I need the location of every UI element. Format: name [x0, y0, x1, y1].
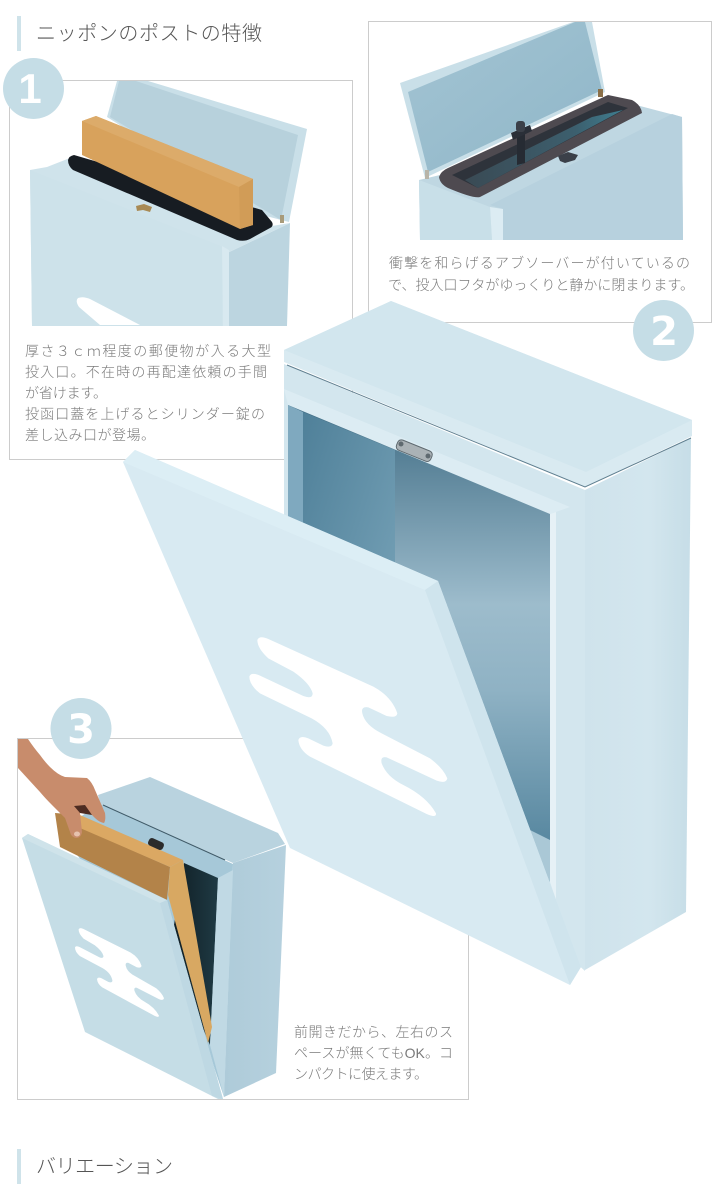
badge 1 — [3, 58, 64, 119]
text block 2: で、投入口フタがゆっくりと静かに閉まります。 — [388, 277, 694, 293]
photo: front opening with parcel and hand — [18, 739, 286, 1099]
main illustration: open mailbox — [123, 301, 692, 985]
icon: cloud cut-out emblem — [249, 637, 447, 816]
text block 3: ンパクトに使えます。 — [294, 1066, 428, 1082]
text block 2 — [388, 255, 694, 293]
latch plate — [395, 439, 433, 463]
panel 2: absorber lid — [368, 22, 712, 322]
badge 3 — [50, 698, 112, 759]
text block 1: 投函口蓋を上げるとシリンダー錠の — [25, 406, 265, 422]
text block 1: 投入口。不在時の再配達依頼の手間 — [25, 364, 267, 380]
heading: バリエーション: バリエーション — [36, 1156, 173, 1178]
text block 1: が省けます。 — [25, 385, 107, 401]
front door with cloud cut-out — [123, 450, 581, 985]
panel 3: front opening — [18, 738, 468, 1100]
text block 1 — [25, 343, 271, 443]
text block 3: 前開きだから、左右のス — [294, 1024, 453, 1040]
text block 3 — [294, 1024, 453, 1082]
icon: hand holding parcel — [18, 739, 105, 838]
absorber frame — [439, 95, 642, 197]
badge 2: 2 — [650, 309, 678, 355]
text block 1: 差し込み口が登場。 — [25, 427, 155, 443]
text block 2: 衝撃を和らげるアブソーバーが付いているの — [389, 255, 690, 271]
badge 1: 1 — [18, 65, 42, 112]
text block 1: 厚さ３ｃｍ程度の郵便物が入る大型 — [25, 343, 271, 359]
heading: ニッポンのポストの特徴 — [17, 16, 262, 51]
box lid — [284, 301, 692, 487]
heading: バリエーション — [17, 1149, 173, 1184]
heading: ニッポンのポストの特徴: ニッポンのポストの特徴 — [36, 22, 262, 45]
panel 1: large mail slot — [10, 80, 352, 460]
photo: mail slot with cardboard parcel — [30, 81, 307, 326]
text block 3: ペースが無くてもOK。コ — [294, 1045, 453, 1061]
badge 3: 3 — [67, 707, 95, 753]
icon: white cloud emblem on small door — [75, 928, 164, 1017]
badge 2 — [633, 300, 694, 361]
photo: open lid with absorber frame — [400, 22, 683, 240]
box interior — [288, 405, 550, 882]
box side panel — [585, 438, 691, 970]
box front frame — [284, 364, 585, 971]
